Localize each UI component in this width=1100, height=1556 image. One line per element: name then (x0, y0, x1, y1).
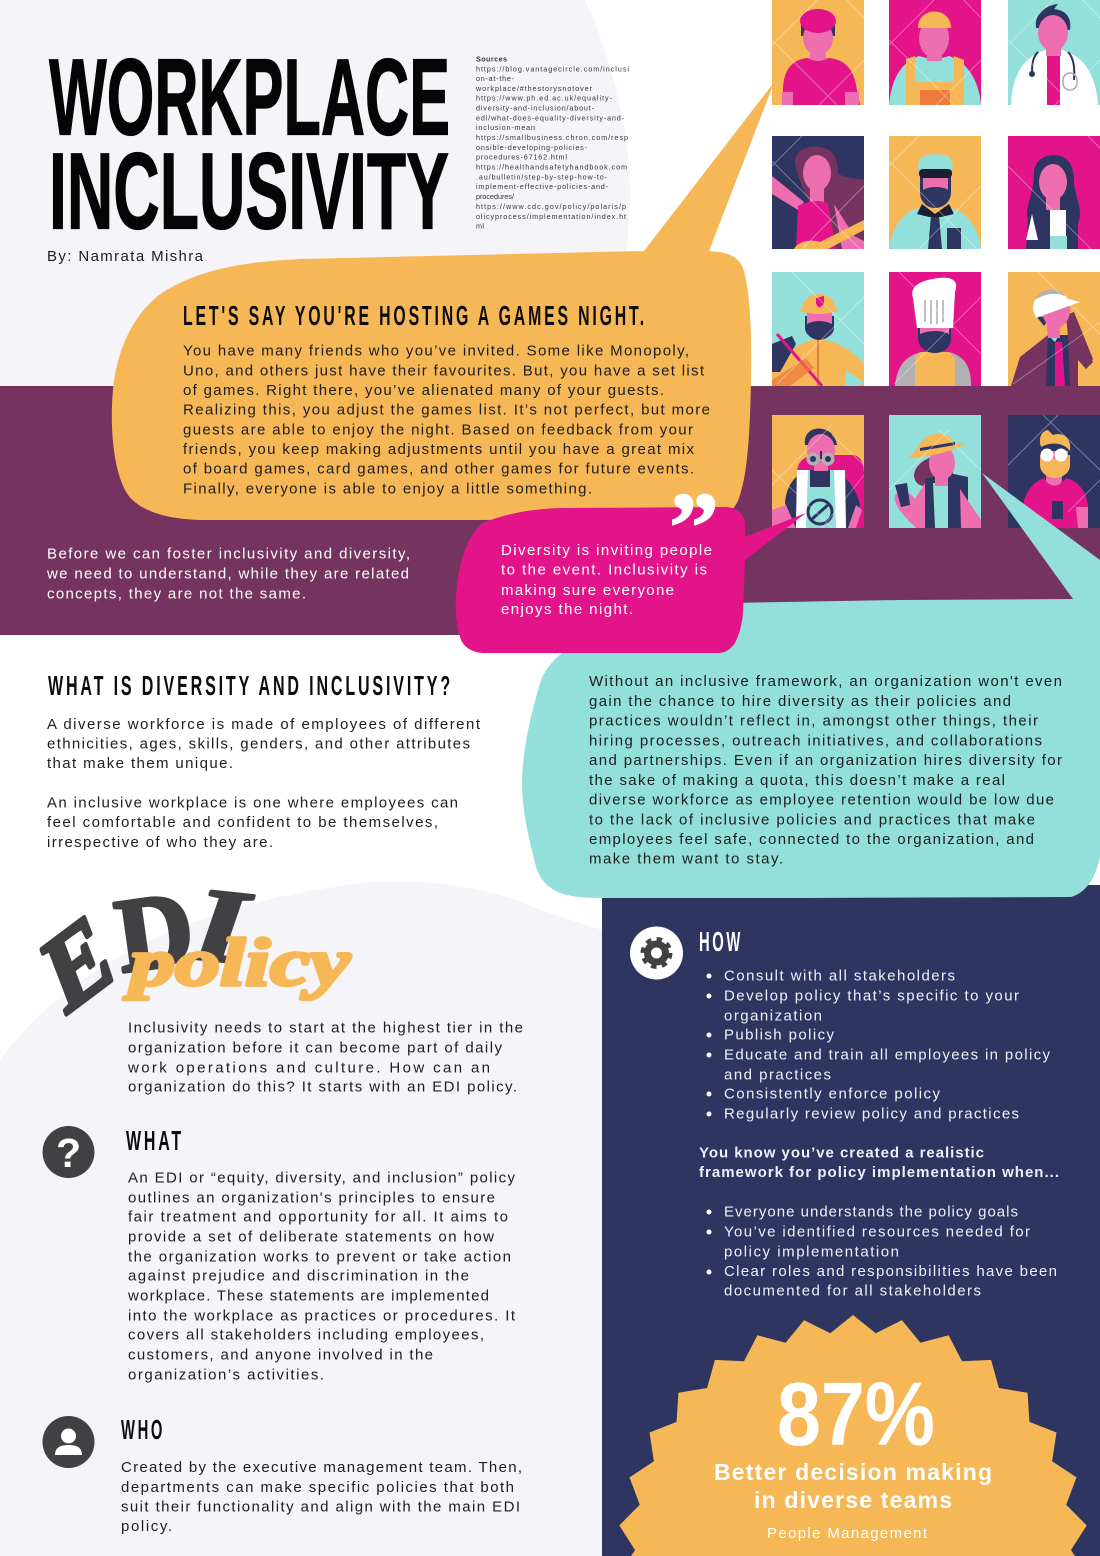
sources (475, 54, 629, 230)
text: EDI intro: work operations and culture. How can an (127, 1060, 490, 1076)
sources: .au/bulletin/step-by-step-how-to- (476, 172, 608, 182)
text: teal callout (589, 673, 1062, 868)
text: pink callout: enjoys the night. (501, 601, 633, 618)
text: what: workplace. These statements are implemented (127, 1288, 489, 1304)
text: what: An EDI or “equity, diversity, and inclusion” policy (128, 1170, 516, 1186)
text: teal callout: practices wouldn’t reflect in, amongst other things, their (589, 712, 1038, 730)
list: framework checks: documented for all stakeholders (724, 1282, 981, 1300)
text: games night story: friends, you keep making adjustments until you have a great mix (183, 441, 694, 458)
list: framework checks: Clear roles and responsibilities have been (724, 1263, 1057, 1280)
text: what: outlines an organization's principles to ensure (128, 1190, 495, 1206)
portrait: police officer (889, 136, 981, 249)
band: plum (0, 386, 1100, 635)
sources: workplace/#thestorysnotover (475, 84, 593, 93)
list: how steps: organization (724, 1008, 822, 1024)
text: pink callout (501, 542, 712, 618)
text: realistic framework lead-in: framework for policy implementation when... (699, 1164, 1059, 1181)
text: teal callout: diverse workforce as employee retention would be low due (589, 792, 1054, 808)
text: what: against prejudice and discrimination in the (128, 1268, 469, 1284)
list: how steps: Consistently enforce policy (724, 1086, 940, 1102)
logo: EDI policy: D (109, 868, 200, 995)
text: pink callout: Diversity is inviting people (501, 542, 712, 559)
portrait: woman with sun hat (889, 415, 981, 528)
text: definitions: An inclusive workplace is one where employees can (47, 794, 458, 812)
heading: what: WHAT (126, 1125, 184, 1156)
text: diversity vs inclusivity intro (46, 546, 410, 602)
list: how steps: Develop policy that’s specific to your (724, 988, 1019, 1004)
text: teal callout: employees feel safe, connected to the organization, and (589, 831, 1034, 848)
text: definitions: feel comfortable and confident to be themselves, (47, 814, 438, 831)
text: what: organization’s activities. (128, 1366, 324, 1384)
text: what: provide a set of deliberate statements on how (128, 1228, 494, 1246)
panel: navy column (602, 885, 1100, 1556)
icon: question mark (42, 1126, 94, 1178)
text: teal callout: Without an inclusive framework, an organization won't even (589, 673, 1062, 690)
text: pink callout: making sure everyone (501, 582, 674, 599)
text: who (121, 1459, 522, 1535)
heading: who: WHO (121, 1414, 165, 1445)
portrait: guitarist (772, 136, 864, 249)
text: games night story: guests are able to enjoy the night. Based on feedback from your (183, 422, 693, 438)
text: games night story: Uno, and others just have their favourites. But, you have a set list (183, 362, 705, 380)
sources: implement-effective-policies-and- (476, 182, 609, 191)
logo: EDI policy: I (185, 865, 257, 987)
background blob: lower left (0, 881, 602, 1556)
sources: https://www.cdc.gov/policy/polaris/p (476, 202, 626, 211)
text: teal callout: make them want to stay. (589, 850, 783, 868)
text: teal callout: hiring processes, outreach initiatives, and collaborations (589, 732, 1042, 750)
sources: https://smallbusiness.chron.com/resp (476, 133, 628, 142)
byline: By: Namrata Mishra (47, 248, 204, 265)
portrait: doctor (1008, 0, 1100, 105)
text: games night story (183, 342, 710, 498)
speech bubble: pink (456, 507, 806, 653)
icon: quotation mark: ” (669, 472, 719, 583)
text: pink callout: to the event. Inclusivity is (501, 562, 707, 578)
statistic caption: in diverse teams (754, 1487, 952, 1513)
logo: EDI policy (31, 865, 351, 1037)
text: what: covers all stakeholders including employees, (128, 1326, 484, 1344)
text: EDI intro: organization before it can become part of daily (128, 1040, 502, 1056)
text: what: fair treatment and opportunity for all. It aims to (128, 1208, 508, 1226)
sources: olicyprocess/implementation/index.ht (476, 212, 626, 221)
text: EDI intro (127, 1020, 523, 1096)
list: how steps (706, 968, 1050, 1122)
list: how steps: Publish policy (724, 1026, 834, 1044)
list: how steps: Consult with all stakeholders (724, 968, 955, 984)
sources: procedures/ (476, 192, 514, 201)
sources: ml (476, 222, 484, 230)
title: INCLUSIVITY (49, 130, 449, 252)
sources: Sources (476, 54, 507, 64)
portrait row 1 to 3 (772, 0, 1100, 386)
text: what (127, 1170, 516, 1384)
list: how steps: and practices (724, 1066, 831, 1084)
statistic caption: People Management (767, 1525, 928, 1542)
text: definitions: A diverse workforce is made of employees of different (47, 716, 481, 733)
list: framework checks (706, 1204, 1057, 1300)
text: games night story: You have many friends who you’ve invited. Some like Monopoly, (183, 342, 689, 360)
text: games night story: Finally, everyone is able to enjoy a little something. (183, 480, 592, 498)
statistic caption (714, 1459, 992, 1542)
statistic number: 87% (777, 1365, 935, 1465)
list: how steps: Regularly review policy and practices (724, 1106, 1019, 1122)
portrait: man with glasses (1008, 415, 1100, 528)
text: teal callout: gain the chance to hire diversity as their policies and (589, 693, 1011, 710)
portrait: lab worker (772, 415, 864, 528)
text: EDI intro: Inclusivity needs to start at the highest tier in the (128, 1020, 523, 1036)
text: diversity vs inclusivity intro: we need to understand, while they are related (46, 566, 409, 582)
logo: EDI policy: policy (123, 924, 351, 1000)
statistic caption: Better decision making (714, 1459, 992, 1485)
text: who: departments can make specific policies that both (121, 1479, 514, 1496)
text: definitions: ethnicities, ages, skills, genders, and other attributes (47, 736, 470, 752)
sources: edi/what-does-equality-diversity-and- (476, 114, 625, 122)
icon: person (42, 1416, 94, 1468)
sources: inclusion-mean (476, 123, 535, 132)
text: what: the organization works to prevent or take action (128, 1248, 511, 1266)
list: how steps: Educate and train all employees in policy (724, 1046, 1050, 1064)
speech bubble: yellow (112, 85, 772, 520)
text: teal callout: to the lack of inclusive policies and practices that make (589, 812, 1035, 828)
text: teal callout: the sake of making a quota, this doesn’t make a real (589, 772, 1005, 789)
badge: statistic (619, 1315, 1087, 1556)
sources: https://healthandsafetyhandbook.com (476, 162, 627, 172)
portrait: firefighter (772, 272, 864, 386)
sources: https://blog.vantagecircle.com/inclusi (476, 64, 629, 74)
text: games night story: of games. Right there, you’ve alienated many of your guests. (183, 382, 664, 399)
title (49, 36, 450, 252)
text: EDI intro: organization do this? It starts with an EDI policy. (128, 1078, 517, 1096)
text: who: policy. (121, 1518, 172, 1535)
heading: games night: LET'S SAY YOU'RE HOSTING A GAMES NIGHT. (183, 300, 647, 331)
text: who: suit their functionality and align with the main EDI (121, 1498, 520, 1516)
text: definitions: irrespective of who they are. (47, 834, 273, 851)
list: framework checks: Everyone understands the policy goals (724, 1204, 1018, 1220)
text: what: customers, and anyone involved in the (128, 1346, 433, 1364)
sources: procedures-67162.html (476, 152, 567, 162)
sources: https://www.ph.ed.ac.uk/equality- (476, 94, 613, 102)
text: definitions (47, 716, 481, 851)
text: diversity vs inclusivity intro: Before we can foster inclusivity and diversity, (47, 546, 410, 562)
portrait: engineer on the phone (1008, 272, 1100, 386)
portrait: chef (889, 272, 981, 386)
text: games night story: Realizing this, you adjust the games list. It’s not perfect, but more (183, 402, 710, 418)
portrait: delivery worker (772, 0, 864, 105)
text: realistic framework lead-in: You know you’ve created a realistic (699, 1144, 984, 1162)
icon: question mark: ? (56, 1130, 81, 1176)
logo: EDI policy: E (31, 889, 124, 1037)
portrait: woman with long hair (1008, 136, 1100, 249)
text: teal callout: and partnerships. Even if an organization hires diversity for (589, 752, 1062, 769)
portrait: construction worker (889, 0, 981, 105)
sources: onsible-developing-policies- (476, 143, 588, 152)
text: who: Created by the executive management team. Then, (121, 1459, 522, 1476)
portrait row 4 (772, 415, 1100, 528)
text: realistic framework lead-in (699, 1144, 1059, 1181)
background blob: top left (0, 0, 630, 386)
text: games night story: of board games, card games, and other games for future events. (183, 460, 694, 478)
text: diversity vs inclusivity intro: concepts, they are not the same. (47, 586, 306, 602)
speech bubble: teal (522, 473, 1100, 898)
list: framework checks: policy implementation (724, 1244, 899, 1260)
list: framework checks: You’ve identified resources needed for (724, 1224, 1030, 1240)
title: WORKPLACE (49, 36, 450, 158)
text: what: into the workplace as practices or procedures. It (128, 1308, 516, 1324)
sources: on-at-the- (476, 74, 515, 83)
text: definitions: that make them unique. (47, 755, 233, 772)
heading: what is diversity: WHAT IS DIVERSITY AND INCLUSIVITY? (48, 670, 453, 701)
icon: gear (630, 926, 683, 980)
sources: diversity-and-inclusion/about- (476, 104, 595, 112)
heading: how: HOW (699, 926, 743, 957)
